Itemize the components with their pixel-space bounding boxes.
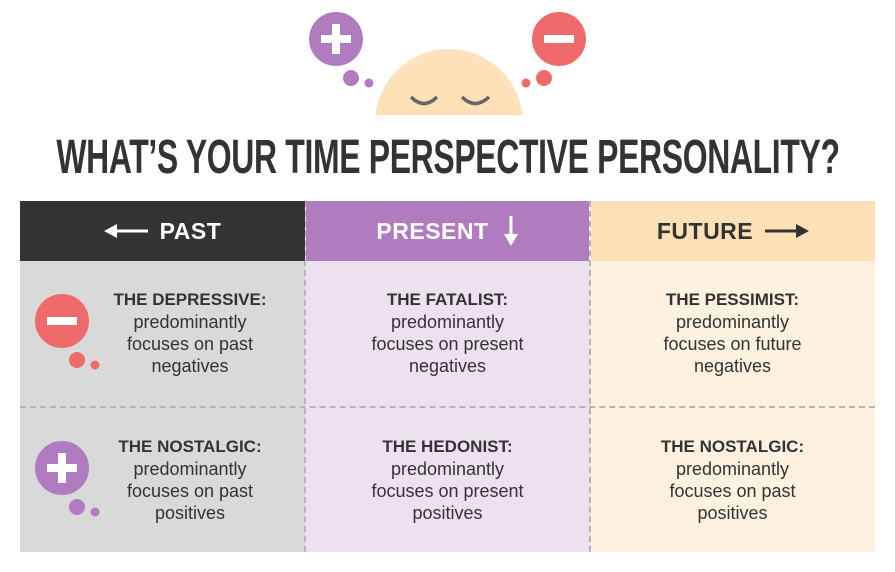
header: present: PRESENT — [376, 218, 489, 244]
header: past — [20, 201, 305, 261]
text: depressive: THE DEPRESSIVE: — [113, 290, 267, 309]
text: nostalgic: predominantly focuses on past positives — [127, 459, 253, 523]
text: pessimist — [663, 290, 802, 376]
text: nostalgic: THE NOSTALGIC: — [118, 437, 262, 456]
header: past: PAST — [160, 218, 221, 244]
text: fatalist: focuses on present — [371, 334, 524, 354]
icon: minus row — [35, 294, 100, 370]
text: hedonist: THE HEDONIST: — [382, 437, 513, 456]
text: nostalgic future: focuses on past — [669, 481, 796, 501]
text: fatalist — [371, 290, 524, 376]
header: future — [591, 201, 875, 261]
icon: plus row — [35, 441, 100, 516]
illustration: face with thought bubbles — [309, 12, 586, 115]
text: fatalist: predominantly — [391, 312, 504, 332]
title: WHAT’S YOUR TIME PERSPECTIVE PERSONALITY? — [56, 131, 840, 184]
icon: plus bubble — [309, 12, 374, 88]
text: nostalgic future: positives — [697, 503, 768, 523]
text: pessimist: predominantly — [676, 312, 789, 332]
text: nostalgic future — [661, 437, 804, 523]
header: present — [306, 201, 589, 261]
text: fatalist: negatives — [409, 356, 486, 376]
text: depressive — [113, 290, 267, 376]
text: hedonist: predominantly — [391, 459, 504, 479]
text: pessimist: negatives — [694, 356, 771, 376]
text: pessimist: focuses on future — [663, 334, 802, 354]
icon: minus bubble — [522, 12, 586, 88]
header: future: FUTURE — [657, 218, 753, 244]
text: hedonist — [371, 437, 524, 523]
icon: face — [376, 49, 522, 115]
text: nostalgic future: THE NOSTALGIC: — [661, 437, 804, 456]
text: nostalgic future: predominantly — [676, 459, 789, 479]
text: hedonist: focuses on present — [371, 481, 524, 501]
text: hedonist: positives — [412, 503, 483, 523]
text: pessimist: THE PESSIMIST: — [666, 290, 799, 309]
text: depressive: predominantly focuses on past negatives — [127, 312, 253, 376]
text: nostalgic — [118, 437, 262, 523]
text: fatalist: THE FATALIST: — [387, 290, 508, 309]
table backgrounds — [20, 261, 305, 552]
